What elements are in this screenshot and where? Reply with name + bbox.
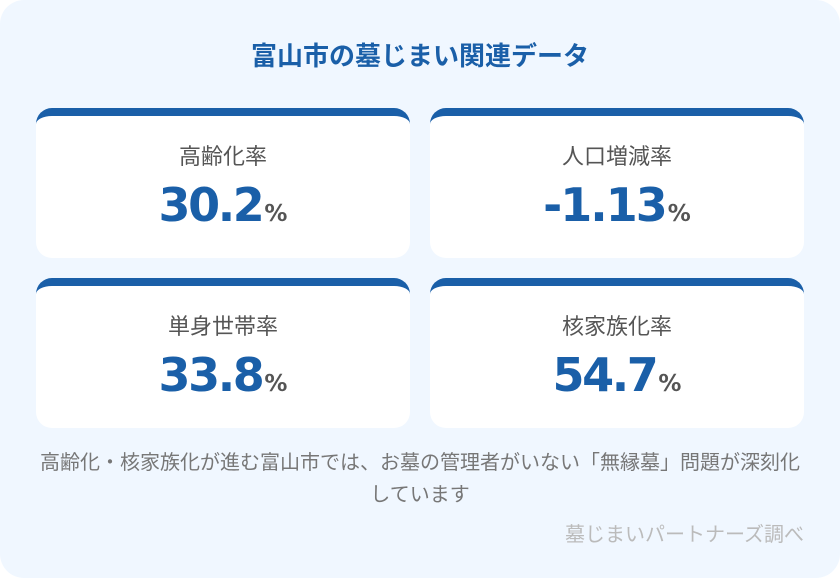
value: single households: 33.8% xyxy=(159,348,287,402)
title: 富山市の墓じまい関連データ xyxy=(251,42,589,72)
label: single households: 単身世帯率 xyxy=(168,315,278,340)
label: nuclear families: 核家族化率 xyxy=(562,315,672,340)
label: population change: 人口増減率 xyxy=(562,145,672,170)
value: population change: -1.13% xyxy=(543,178,691,232)
value: nuclear families: 54.7% xyxy=(553,348,681,402)
source credit: 墓じまいパートナーズ調べ xyxy=(565,522,804,546)
panel: single households xyxy=(36,278,410,428)
label: aging rate: 高齢化率 xyxy=(179,145,267,170)
panel: nuclear families xyxy=(430,278,804,428)
value: aging rate: 30.2% xyxy=(159,178,287,232)
panel: population change xyxy=(430,108,804,258)
panel: aging rate xyxy=(36,108,410,258)
description text: 高齢化・核家族化が進む富山市では、お墓の管理者がいない「無縁墓」問題が深刻化しています xyxy=(40,450,800,506)
